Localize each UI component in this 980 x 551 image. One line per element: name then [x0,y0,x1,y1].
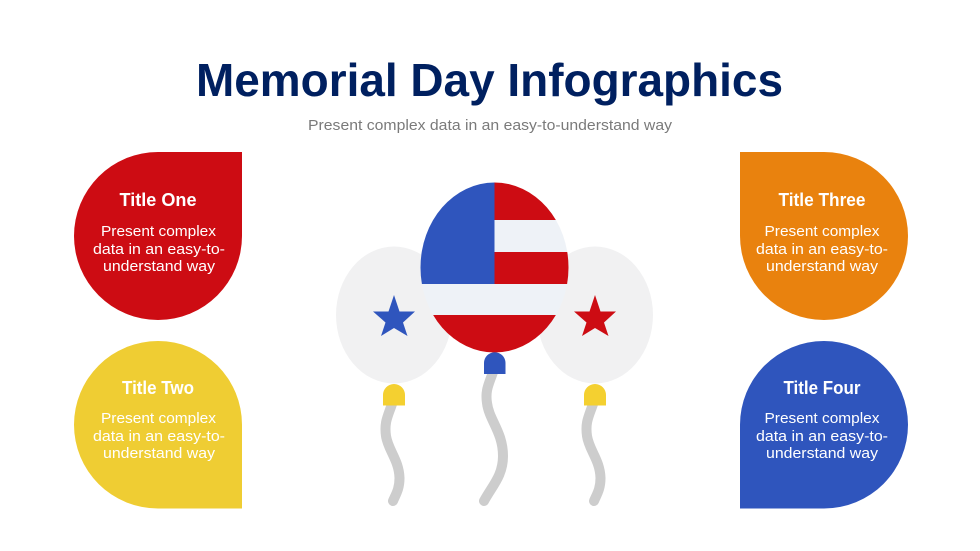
subtitle: Present complex data in an easy-to-understand way [308,117,673,134]
panel: title two [74,341,242,508]
panel: title four: Present complex [764,411,880,427]
panel: title one: understand way [103,259,216,275]
panel: title two: Present complex [101,411,217,427]
panel: title three: Title Three [778,190,866,210]
panel: title two: data in an easy-to- [93,429,225,445]
balloon: centre flag [420,182,570,501]
panel: title three [740,152,908,320]
panel: title four: Title Four [784,378,860,398]
panel: title three: understand way [766,259,879,275]
panel: title four [740,341,908,508]
panel: title four: understand way [766,446,879,462]
panel: title one: Title One [120,190,196,210]
panel: title four: data in an easy-to- [756,429,888,445]
panel: title one [74,152,242,320]
balloon: left with blue star [336,246,452,501]
panel: title three: data in an easy-to- [756,242,888,258]
panel: title two: understand way [103,446,216,462]
panel: title one: Present complex [101,224,217,240]
title: Memorial Day Infographics [196,54,783,106]
panel: title three: Present complex [764,224,880,240]
balloons illustration [336,182,653,501]
balloon: right with red star [537,246,653,501]
panel: title one: data in an easy-to- [93,242,225,258]
panel: title two: Title Two [122,378,194,398]
